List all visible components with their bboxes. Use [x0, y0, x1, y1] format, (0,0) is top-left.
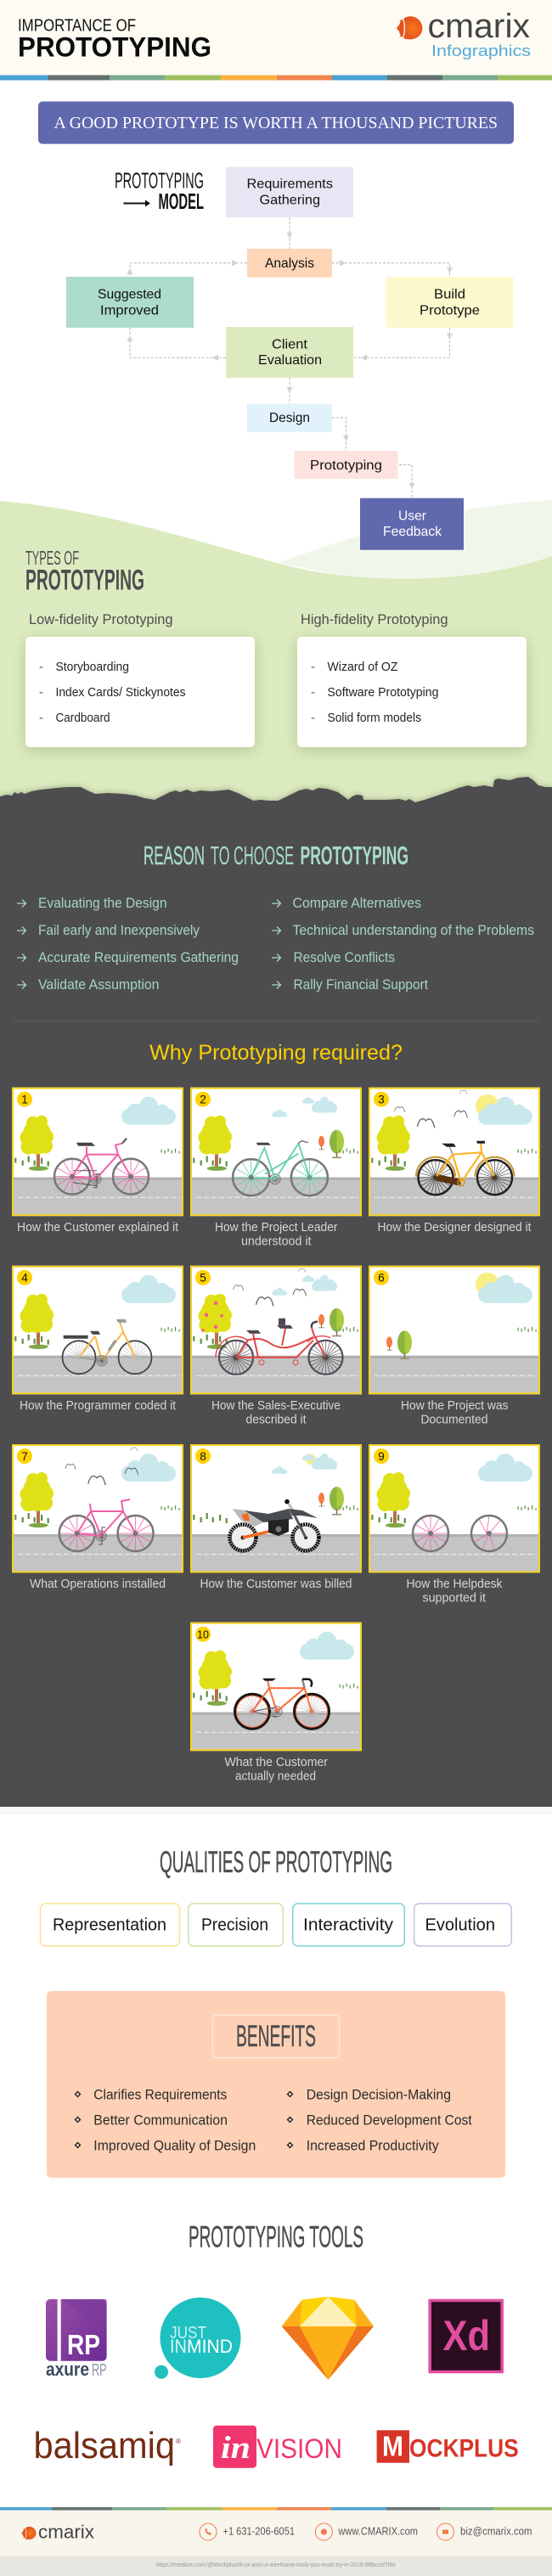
panel: high-fidelity prototyping: Software Prototyping	[328, 685, 438, 700]
header band	[0, 0, 552, 75]
panel: benefits	[47, 1991, 505, 2178]
pill: evolution: Evolution	[425, 1915, 495, 1934]
pill: representation: Representation	[53, 1915, 166, 1934]
footer logo: cmarix	[38, 2521, 94, 2542]
caption 5	[211, 1399, 341, 1427]
badge 3: 3	[378, 1094, 385, 1106]
badge 8	[195, 1448, 211, 1464]
list: reasons: Technical understanding of the Problems	[292, 922, 534, 938]
caption 4: How the Programmer coded it	[20, 1399, 176, 1413]
logo: axure rp: RP	[92, 2361, 107, 2380]
green wave background	[0, 500, 552, 807]
bike: pink	[54, 1139, 149, 1195]
heading: prototyping tools: PROTOTYPING TOOLS	[189, 2221, 363, 2254]
badge 7	[17, 1448, 32, 1464]
list: reasons	[17, 895, 534, 993]
heading: reason to choose prototyping: REASON	[144, 841, 205, 870]
title: importance of prototyping: PROTOTYPING	[18, 32, 211, 63]
logo: justinmind: MIND	[187, 2336, 233, 2357]
contact: phone	[200, 2523, 295, 2540]
caption 2	[215, 1221, 338, 1249]
logo: justinmind: IN	[170, 2336, 187, 2357]
caption 9: How the Helpdesk	[406, 1578, 503, 1591]
bike: mint	[233, 1141, 328, 1195]
model heading	[115, 170, 204, 214]
box: requirements gathering: Requirements	[246, 177, 333, 192]
caption 6: How the Project was	[401, 1399, 508, 1413]
benefits list: Better Communication	[93, 2112, 228, 2129]
heading: types of prototyping: PROTOTYPING	[25, 564, 144, 596]
bike: pink without saddle	[59, 1499, 154, 1551]
caption 8: How the Customer was billed	[200, 1578, 352, 1591]
color stripe bottom	[0, 2507, 552, 2510]
box: suggested improved: Suggested	[98, 288, 161, 302]
list: reasons: Rally Financial Support	[294, 976, 428, 993]
benefits list	[93, 2087, 472, 2154]
contact: phone: +1 631-206-6051	[222, 2525, 295, 2538]
pill: precision: Precision	[201, 1915, 268, 1934]
source link band: https://medium.com/@Mockplus/8-ux-and-ui-wireframe-tools-you-must-try-in-2016-f8fbcccf7f6e	[156, 2562, 396, 2568]
contact: web	[315, 2523, 418, 2540]
badge 4	[17, 1270, 32, 1285]
panel: low-fidelity prototyping: -	[39, 660, 43, 674]
caption 9: supported it	[423, 1592, 486, 1606]
qualities pills	[41, 1904, 511, 1946]
panel: low-fidelity prototyping: -	[39, 685, 43, 700]
badge 5: 5	[200, 1272, 206, 1285]
panel: high-fidelity prototyping: Solid form models	[328, 711, 421, 725]
box: analysis	[247, 249, 332, 278]
badge 4: 4	[21, 1272, 28, 1285]
badge 1: 1	[21, 1094, 28, 1106]
badge 2	[195, 1092, 211, 1107]
card 1: customer explained	[12, 1088, 183, 1216]
logo: mockplus: M	[382, 2431, 403, 2462]
logo: cmarix infographics	[397, 8, 531, 59]
caption 6	[401, 1399, 508, 1427]
caption 3: How the Designer designed it	[377, 1221, 532, 1235]
badge 3	[374, 1092, 389, 1107]
pill: interactivity: Interactivity	[303, 1915, 394, 1934]
box: client evaluation: Client	[272, 338, 308, 352]
panel: low-fidelity prototyping	[25, 611, 255, 747]
badge 2: 2	[200, 1094, 206, 1106]
box: prototyping	[294, 451, 397, 479]
model heading: MODEL	[158, 190, 204, 214]
badge 9: 9	[378, 1450, 385, 1463]
logo: justinmind	[155, 2298, 241, 2379]
logo: cmarix infographics: cmarix	[428, 8, 530, 45]
logo: invision: VISION	[256, 2433, 342, 2464]
list: reasons: Validate Assumption	[38, 976, 160, 993]
badge 6	[374, 1270, 389, 1285]
banner: a good prototype	[38, 102, 514, 144]
benefits list: Reduced Development Cost	[307, 2112, 472, 2129]
list: reasons: Resolve Conflicts	[294, 949, 395, 965]
badge 5	[195, 1270, 211, 1285]
model heading: PROTOTYPING	[115, 170, 204, 194]
card 6: project documented	[369, 1266, 540, 1394]
card 8: customer billed	[190, 1444, 362, 1572]
logo: sketch	[282, 2297, 374, 2380]
card 4: programmer coded	[12, 1266, 183, 1394]
bike: orange racing	[234, 1679, 330, 1729]
bike: yellow	[63, 1319, 151, 1374]
box: design: Design	[269, 411, 310, 425]
badge 6: 6	[378, 1272, 385, 1285]
panel: high-fidelity prototyping: Wizard of OZ	[328, 660, 397, 674]
list: reasons: Compare Alternatives	[292, 895, 421, 911]
benefits list: Clarifies Requirements	[93, 2087, 227, 2103]
card 10: customer actually needed	[190, 1623, 362, 1751]
caption 10: What the Customer	[224, 1756, 328, 1769]
contact: email: biz@cmarix.com	[460, 2525, 532, 2538]
logo: invision: in	[221, 2431, 251, 2466]
logo: axure rp	[46, 2299, 107, 2380]
panel: low-fidelity prototyping: Storyboarding	[56, 660, 129, 674]
logo: mockplus: OCKPLUS	[409, 2434, 519, 2462]
box: requirements gathering: Gathering	[260, 194, 320, 208]
dark section background with torn edge	[0, 777, 552, 1807]
box: build prototype	[386, 277, 513, 328]
caption 2: How the Project Leader	[215, 1221, 338, 1235]
badge 10	[195, 1627, 211, 1642]
prototyping model flow chart	[66, 167, 513, 550]
card 5: sales executive described	[190, 1266, 362, 1394]
box: suggested improved: Improved	[100, 304, 159, 318]
logo: cmarix infographics: Infographics	[431, 42, 531, 59]
panel: high-fidelity prototyping: High-fidelity Prototyping	[301, 611, 448, 627]
badge 8: 8	[200, 1450, 206, 1463]
box: design	[247, 404, 332, 432]
logo: axure rp: RP	[67, 2329, 100, 2360]
badge 1	[17, 1092, 32, 1107]
caption 5: How the Sales-Executive	[211, 1399, 341, 1413]
logo: adobe xd: Xd	[443, 2312, 490, 2359]
box: user feedback: Feedback	[383, 525, 442, 539]
banner: a good prototype: A GOOD PROTOTYPE IS WORTH A THOUSAND PICTURES	[54, 114, 498, 132]
contact: web: www.CMARIX.com	[338, 2525, 418, 2538]
caption 7: What Operations installed	[30, 1578, 166, 1591]
box: prototyping: Prototyping	[310, 458, 382, 473]
title: importance of prototyping: IMPORTANCE OF	[18, 17, 136, 36]
caption 5: described it	[246, 1414, 306, 1427]
heading: types of prototyping: TYPES OF	[25, 547, 79, 569]
benefits list: Design Decision-Making	[307, 2087, 451, 2103]
motorbike	[229, 1499, 319, 1550]
bike: orange	[416, 1141, 515, 1195]
panel: low-fidelity prototyping: -	[39, 711, 43, 725]
caption 2: understood it	[241, 1235, 311, 1249]
pill: representation	[41, 1904, 180, 1946]
box: client evaluation: Evaluation	[258, 353, 322, 368]
badge 7: 7	[21, 1450, 28, 1463]
caption 9	[406, 1578, 503, 1606]
card 3: designer designed	[369, 1088, 540, 1216]
panel: high-fidelity prototyping: -	[311, 660, 315, 674]
panel: high-fidelity prototyping: -	[311, 685, 315, 700]
logo: balsamiq: ®	[176, 2438, 181, 2445]
panel: high-fidelity prototyping: -	[311, 711, 315, 725]
box: build prototype: Prototype	[420, 304, 480, 318]
logo: balsamiq: balsamiq	[34, 2425, 175, 2466]
list: reasons: Evaluating the Design	[38, 895, 166, 911]
heading: reason to choose prototyping	[144, 841, 408, 870]
badge 10: 10	[197, 1628, 209, 1640]
connectors	[127, 217, 453, 498]
box: suggested improved	[66, 277, 194, 328]
card 9: helpdesk supported	[369, 1444, 540, 1572]
heading: why prototyping required: Why Prototyping required?	[149, 1041, 403, 1065]
contact: email	[437, 2523, 532, 2540]
panel: high-fidelity prototyping	[297, 611, 527, 747]
bike: red tandem	[216, 1319, 343, 1375]
box: user feedback: User	[398, 509, 427, 524]
caption 1: How the Customer explained it	[17, 1221, 178, 1235]
benefits list: Improved Quality of Design	[93, 2138, 256, 2154]
benefits list: Increased Productivity	[307, 2138, 439, 2154]
caption 10	[224, 1756, 328, 1784]
logo: invision	[213, 2426, 342, 2468]
logo: adobe xd	[430, 2301, 502, 2372]
logo: mockplus	[377, 2430, 519, 2463]
panel: low-fidelity prototyping: Cardboard	[56, 711, 110, 725]
pill: precision	[189, 1904, 283, 1946]
heading: benefits	[212, 2015, 340, 2058]
card 7: operations installed	[12, 1444, 183, 1572]
caption 10: actually needed	[235, 1770, 316, 1784]
pill: interactivity	[293, 1904, 404, 1946]
footer band	[0, 2510, 552, 2556]
heading: reason to choose prototyping: PROTOTYPING	[301, 841, 408, 870]
pill: evolution	[414, 1904, 511, 1946]
heading: benefits: BENEFITS	[236, 2020, 316, 2053]
box: user feedback	[360, 498, 464, 550]
box: requirements gathering	[226, 167, 353, 217]
card 2: project leader understood	[190, 1088, 362, 1216]
badge 9	[374, 1448, 389, 1464]
title: importance of prototyping	[18, 17, 211, 63]
list: reasons: Accurate Requirements Gathering	[38, 949, 239, 965]
box: build prototype: Build	[434, 288, 465, 302]
list: reasons: Fail early and Inexpensively	[38, 922, 200, 938]
color stripe top	[0, 75, 552, 80]
logo: justinmind: JUST	[170, 2324, 206, 2343]
box: analysis: Analysis	[265, 256, 314, 271]
panel: low-fidelity prototyping: Low-fidelity Prototyping	[29, 611, 173, 627]
heading: reason to choose prototyping: TO CHOOSE	[211, 841, 294, 870]
source link band	[0, 2556, 552, 2576]
box: client evaluation	[226, 327, 353, 378]
logo: axure rp: axure	[46, 2359, 89, 2380]
panel: low-fidelity prototyping: Index Cards/ Stickynotes	[56, 685, 185, 700]
bullets	[75, 2090, 294, 2148]
wheels only	[413, 1516, 507, 1551]
caption 6: Documented	[421, 1414, 487, 1427]
heading: types of prototyping	[25, 547, 144, 596]
